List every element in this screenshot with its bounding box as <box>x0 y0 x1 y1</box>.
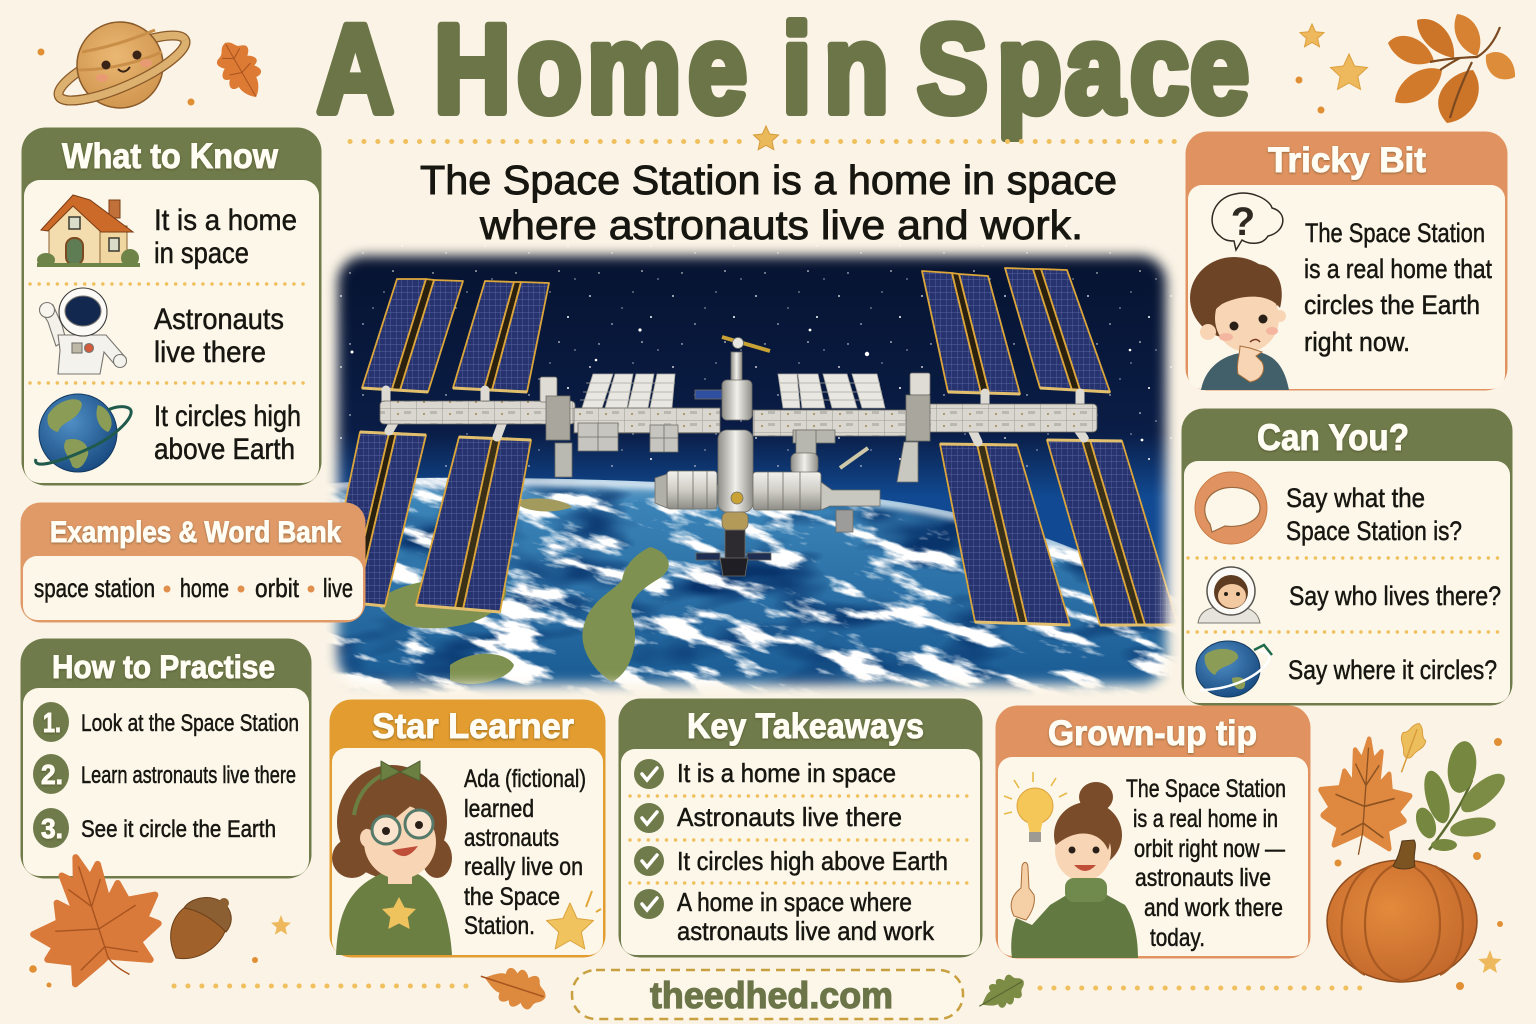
text: Ada story: Ada (fictional) <box>464 765 586 793</box>
text: It circles high: above Earth <box>154 433 295 466</box>
icon: speech bubble <box>1195 472 1267 544</box>
icon: footer oak leaf left <box>475 958 551 1016</box>
heading: Grown-up tip: Grown-up tip <box>1048 714 1257 753</box>
icon: oak leaf top left <box>208 33 273 106</box>
text: Ada story: the Space <box>464 883 560 911</box>
icon: thought bubble: ? <box>1231 200 1255 244</box>
takeaway 4: astronauts live and work <box>677 916 935 946</box>
icon: footer green leaf right <box>972 968 1031 1019</box>
icon: gold star <box>546 891 601 949</box>
step 1 <box>33 702 299 742</box>
icon: autumn leaf, lower right <box>1316 736 1414 858</box>
word bank: orbit <box>255 573 300 603</box>
icon: Earth with orbit <box>36 394 131 472</box>
text: It is a home: It is a home <box>154 204 297 237</box>
text: It circles high: It circles high <box>154 400 301 433</box>
icon: astronaut waving <box>40 288 126 374</box>
text: It circles high <box>154 400 301 466</box>
text: tip: astronauts live <box>1135 864 1271 892</box>
heading: Star Learner: Star Learner <box>372 707 574 746</box>
icon: stars top right <box>1300 24 1368 89</box>
heading: How to Practise: How to Practise <box>52 649 275 685</box>
character: Ada with glasses <box>332 761 452 955</box>
icon: star and dots, lower right <box>1334 738 1503 990</box>
text: tip: orbit right now — <box>1134 835 1285 863</box>
character: thinking boy <box>1190 257 1289 390</box>
icon: small Earth with orbit <box>1196 641 1272 697</box>
icon: acorn <box>171 898 231 959</box>
step 1: Look at the Space Station <box>81 710 299 737</box>
text: Ada story: Station. <box>464 912 535 940</box>
heading: What to Know: What to Know <box>62 137 279 176</box>
footer pill: website: theedhed.com <box>650 975 893 1016</box>
solar arrays <box>325 268 1178 625</box>
text: question 1: Say what the <box>1286 483 1425 513</box>
panel: Can You? <box>1182 408 1512 706</box>
Earth <box>328 478 1176 694</box>
text: tip: is a real home in <box>1133 805 1278 833</box>
icon: green sprig <box>1412 739 1511 851</box>
text: question 1: Space Station is? <box>1286 516 1462 546</box>
text: It is a home: in space <box>154 237 249 270</box>
icon: pumpkin <box>1327 840 1477 982</box>
icon: thought bubble <box>1212 193 1283 250</box>
text: tricky explanation: right now. <box>1304 327 1410 357</box>
icon: planet with smile <box>52 22 192 113</box>
word bank: home <box>180 573 229 603</box>
text: tip: today. <box>1150 924 1205 952</box>
takeaway 4 <box>634 887 935 946</box>
word bank: space station <box>34 573 155 603</box>
icon: small star and dots, lower left <box>29 915 291 988</box>
decorative dots, top right <box>1296 76 1324 114</box>
starfield <box>340 246 1172 467</box>
subtitle: The Space Station is a home in space <box>420 157 1117 203</box>
radiators <box>580 374 885 408</box>
text: It is a home <box>154 204 297 270</box>
step 2: Learn astronauts live there <box>81 762 296 789</box>
icon: light bulb <box>1004 772 1067 842</box>
text: Ada story: learned <box>464 795 534 823</box>
heading: Key Takeaways: Key Takeaways <box>687 707 924 746</box>
text: tricky explanation: is a real home that <box>1304 254 1492 284</box>
decorative dots, top left <box>38 48 194 106</box>
text: Astronauts live there: Astronauts <box>154 303 284 336</box>
icon: small yellow leaf <box>1390 719 1431 777</box>
text: Ada story <box>464 765 586 940</box>
panel: Key Takeaways <box>618 698 982 958</box>
heading: Can You?: Can You? <box>1257 417 1409 458</box>
panel: How to Practise <box>20 638 312 878</box>
step 3: See it circle the Earth <box>81 816 276 843</box>
panel: What to Know <box>22 128 322 486</box>
title: A Home in Space <box>317 0 1249 139</box>
text: question 3: Say where it circles? <box>1288 655 1497 685</box>
word bank <box>34 573 353 603</box>
step 2 <box>33 754 296 794</box>
step 2: 2. <box>41 759 63 790</box>
step 1: 1. <box>43 707 61 738</box>
text: tip: and work there <box>1144 894 1283 922</box>
text: tricky explanation: circles the Earth <box>1304 290 1480 320</box>
continents <box>379 498 669 684</box>
text: question 2: Say who lives there? <box>1289 581 1501 611</box>
clouds <box>328 478 1176 694</box>
text: tip: The Space Station <box>1126 775 1286 803</box>
step 3: 3. <box>41 813 63 844</box>
heading: Tricky Bit: Tricky Bit <box>1268 141 1426 180</box>
takeaway 1: It is a home in space <box>677 758 896 788</box>
central modules <box>655 337 880 576</box>
takeaway 2: Astronauts live there <box>677 802 902 832</box>
panel: Examples & Word Bank <box>20 502 366 622</box>
main illustration: space station above Earth <box>328 246 1176 694</box>
truss <box>380 373 1097 482</box>
subtitle <box>420 157 1117 248</box>
icon: house <box>37 195 140 267</box>
heading: Examples & Word Bank: Examples & Word Bank <box>50 516 341 549</box>
icon: child astronaut <box>1198 567 1260 623</box>
takeaway 3: It circles high above Earth <box>677 846 948 876</box>
word bank: live <box>323 573 353 603</box>
text: Astronauts live there: live there <box>154 336 266 369</box>
icon: centre star <box>754 126 778 150</box>
text: tip <box>1126 775 1286 952</box>
text: tricky explanation: The Space Station <box>1305 218 1485 248</box>
step 3 <box>33 808 276 848</box>
text: question 1 <box>1286 483 1462 546</box>
text: tricky explanation <box>1304 218 1492 357</box>
takeaway 4: A home in space where <box>677 887 912 917</box>
text: Ada story: really live on <box>464 853 583 881</box>
panel: Tricky Bit <box>1186 132 1508 390</box>
panel: Star Learner <box>330 700 606 958</box>
icon: autumn branch <box>1388 14 1515 123</box>
footer pill: website <box>572 970 963 1019</box>
text: Ada story: astronauts <box>464 824 559 852</box>
character: grown-up <box>1011 782 1138 958</box>
icon: maple leaf <box>15 838 176 999</box>
panel: Grown-up tip <box>996 706 1310 958</box>
subtitle: where astronauts live and work. <box>479 202 1083 248</box>
text: Astronauts live there <box>154 303 284 369</box>
